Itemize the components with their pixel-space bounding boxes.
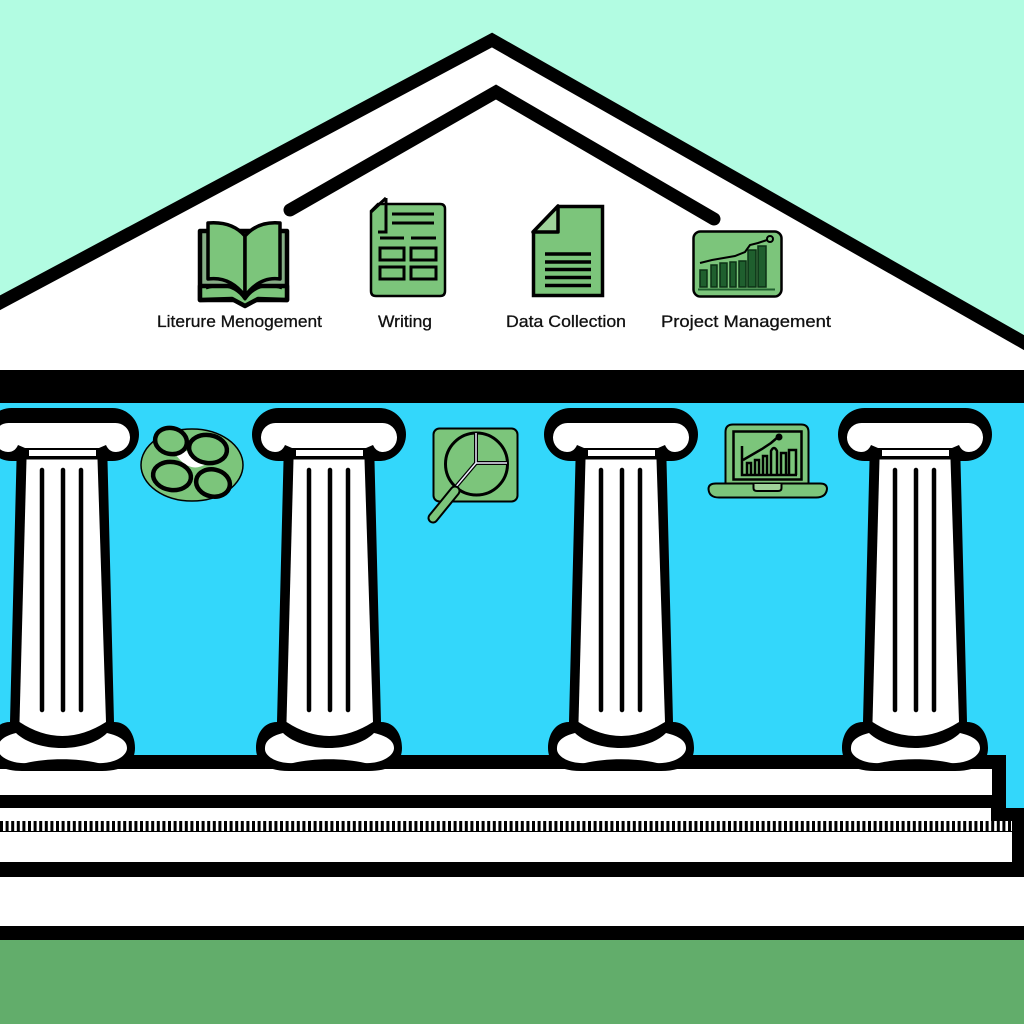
icon: open book: [200, 223, 287, 306]
icon: magnifier with pie chart: [433, 428, 518, 518]
icon: writing sheet: [371, 198, 445, 296]
icon: four ellipses: [141, 425, 243, 501]
column 3: [544, 408, 698, 771]
entablature beam: [0, 370, 1024, 403]
label: writing: Writing: [378, 312, 432, 331]
icon: laptop with chart: [708, 424, 827, 498]
icon: project chart: [694, 232, 782, 296]
column 4: [838, 408, 992, 771]
icon: data document: [533, 206, 602, 296]
roof pediment: [0, 40, 1024, 372]
label: literature management: Literure Menogement: [157, 312, 322, 331]
column 1: [0, 408, 139, 771]
ground: [0, 940, 1024, 1024]
blue colonnade background: [0, 400, 1024, 810]
inner roof line: [290, 92, 714, 219]
temple steps: [0, 755, 1024, 940]
label: project management: Project Management: [661, 312, 831, 331]
column 2: [252, 408, 406, 771]
sky background: [0, 0, 1024, 420]
label: data collection: Data Collection: [506, 312, 626, 331]
